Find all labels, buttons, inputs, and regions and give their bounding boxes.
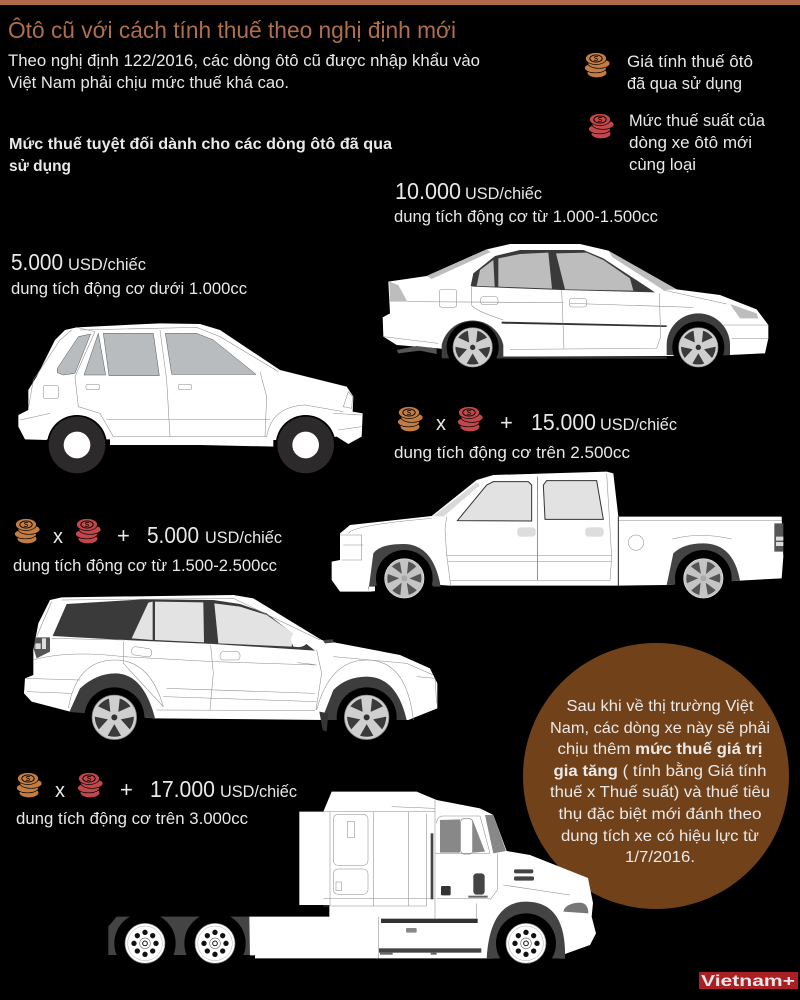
- label: SUV tax: +: [117, 523, 130, 548]
- label: pickup tax: [394, 406, 677, 462]
- label: pickup tax: 15.000: [531, 409, 596, 435]
- car: SUV: [24, 595, 437, 747]
- intro text: Việt Nam phải chịu mức thuế khá cao.: [8, 73, 289, 92]
- icon: red coins: [588, 114, 614, 138]
- legend: đã qua sử dụng: [627, 75, 742, 93]
- circle callout: chịu thêm mức thuế giá trị: [558, 741, 762, 758]
- label: SUV tax: USD/chiếc: [205, 529, 282, 547]
- label: SUV tax: dung tích động cơ từ 1.500-2.500cc: [13, 557, 277, 575]
- label: hatchback tax: dung tích động cơ dưới 1.000cc: [11, 280, 247, 298]
- label: sedan tax: 10.000: [395, 178, 461, 204]
- label: truck tax: 17.000: [150, 776, 215, 802]
- label: hatchback tax: 5.000: [11, 249, 63, 275]
- label: SUV tax: x: [53, 526, 63, 548]
- title: Ôtô cũ với cách tính thuế theo nghị định mới: [8, 16, 456, 43]
- icon: orange coins: [584, 52, 610, 77]
- icon: red coins: [78, 772, 103, 797]
- circle callout: Sau khi về thị trường Việt: [566, 698, 754, 715]
- label: hatchback tax: USD/chiếc: [68, 256, 146, 274]
- label: hatchback tax: [11, 249, 247, 298]
- intro text: [8, 51, 480, 92]
- label: sedan tax: dung tích động cơ từ 1.000-1.500cc: [394, 208, 658, 226]
- legend: [584, 52, 766, 174]
- label: sedan tax: [394, 178, 658, 226]
- top bar: [0, 0, 800, 5]
- label: pickup tax: +: [500, 410, 513, 435]
- circle callout: Nam, các dòng xe này sẽ phải: [550, 720, 770, 737]
- car: sedan: [383, 244, 768, 373]
- label: pickup tax: USD/chiếc: [600, 416, 677, 434]
- circle callout: 1/7/2016.: [625, 849, 695, 866]
- label: SUV tax: [13, 518, 282, 575]
- car: hatchback: [18, 323, 363, 475]
- section heading: Mức thuế tuyệt đối dành cho các dòng ôtô đã qua: [9, 136, 392, 153]
- label: truck tax: x: [55, 780, 65, 802]
- label: SUV tax: 5.000: [147, 522, 199, 548]
- icon: red coins: [458, 406, 483, 431]
- circle callout: gia tăng ( tính bằng Giá tính: [554, 761, 766, 780]
- circle callout: thuế x Thuế suất) và thuế tiêu: [550, 784, 770, 801]
- label: truck tax: USD/chiếc: [220, 783, 297, 801]
- legend: Giá tính thuế ôtô: [627, 53, 753, 71]
- circle callout: [523, 643, 789, 909]
- legend: cùng loại: [629, 156, 696, 174]
- intro text: Theo nghị định 122/2016, các dòng ôtô cũ được nhập khẩu vào: [8, 51, 480, 70]
- legend: dòng xe ôtô mới: [629, 134, 752, 152]
- label: truck tax: dung tích động cơ trên 3.000cc: [16, 810, 248, 828]
- circle callout: dung tích xe có hiệu lực từ: [561, 828, 759, 845]
- label: pickup tax: dung tích động cơ trên 2.500cc: [394, 444, 630, 462]
- icon: orange coins: [398, 406, 423, 431]
- label: truck tax: +: [120, 777, 133, 802]
- logo: Vietnam+: [699, 972, 798, 990]
- logo: Vietnam+: Vietnam+: [701, 973, 795, 990]
- truck: [108, 792, 596, 974]
- label: sedan tax: USD/chiếc: [465, 185, 542, 203]
- label: truck tax: [16, 772, 297, 828]
- section heading: sử dụng: [9, 158, 71, 175]
- legend: Mức thuế suất của: [629, 112, 766, 130]
- section heading: [9, 136, 392, 175]
- icon: red coins: [76, 518, 101, 543]
- icon: orange coins: [14, 518, 40, 543]
- car: pickup: [332, 472, 783, 607]
- icon: orange coins: [16, 772, 42, 797]
- label: pickup tax: x: [436, 413, 446, 435]
- circle callout: thụ đặc biệt mới đánh theo: [558, 806, 762, 823]
